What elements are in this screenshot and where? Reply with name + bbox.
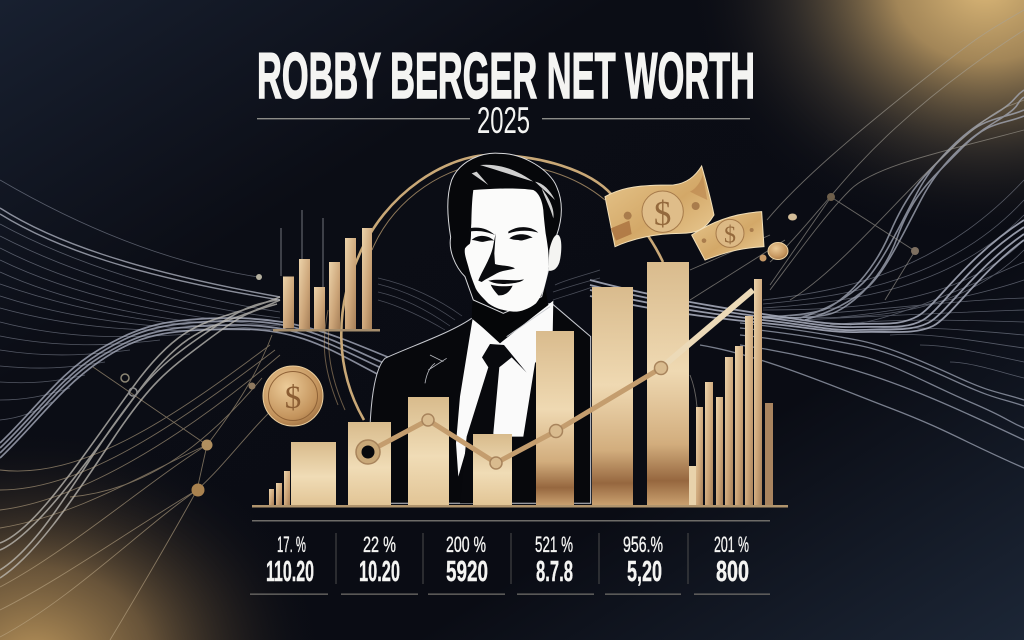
stats axis line <box>252 520 770 522</box>
stat column 4: 8.7.8 <box>536 556 573 588</box>
subtitle year with rules: 2025 <box>477 100 530 141</box>
mouth <box>488 279 524 295</box>
stat column 1 <box>250 532 328 595</box>
coin icon: $ <box>285 380 301 416</box>
stat column 6: 201 % <box>714 532 749 557</box>
stat column 6 <box>694 532 770 595</box>
stat column 5: 956.% <box>623 532 663 557</box>
faint lines behind portrait <box>378 270 600 330</box>
stat column 2: 10.20 <box>359 556 400 588</box>
face <box>465 188 549 312</box>
coin icon <box>263 366 323 426</box>
right ear <box>548 235 561 271</box>
stat column 5: 5,20 <box>627 556 662 588</box>
collar line <box>507 307 550 337</box>
gold arc behind portrait <box>324 155 663 420</box>
stat column 2: 22 % <box>363 532 396 557</box>
shirt <box>456 301 553 477</box>
portrait <box>370 153 591 503</box>
stat column 2 <box>341 532 418 595</box>
main bar chart <box>252 262 788 508</box>
money bills <box>605 166 764 260</box>
trend line <box>356 290 753 469</box>
head and hair <box>448 153 561 313</box>
trend nodes <box>356 362 668 469</box>
suit <box>370 303 591 503</box>
stat column 3: 5920 <box>446 556 488 588</box>
stat column 1: 17. % <box>277 532 306 557</box>
eyes <box>472 234 533 242</box>
stat column 4: 521 % <box>535 532 573 557</box>
stat column 3: 200 % <box>446 532 486 557</box>
stat column 5 <box>605 532 681 595</box>
small bill: $ <box>724 223 736 249</box>
hair highlights <box>472 165 555 218</box>
nose shadow <box>478 233 515 282</box>
stat column 1: 110.20 <box>266 556 314 588</box>
stat column 4 <box>517 532 594 595</box>
right wave bundles <box>590 220 1024 332</box>
brows <box>469 227 538 235</box>
neck shadow <box>472 287 548 342</box>
small bill <box>692 212 764 260</box>
large bill <box>605 166 714 247</box>
large bill: $ <box>654 194 671 233</box>
small bar chart <box>273 210 380 332</box>
floating coin and dots <box>121 193 919 496</box>
stat column 3 <box>428 532 505 595</box>
tie <box>460 344 527 503</box>
stat column 6: 800 <box>716 556 749 588</box>
facial features <box>469 227 538 295</box>
lapel marks <box>425 355 447 383</box>
